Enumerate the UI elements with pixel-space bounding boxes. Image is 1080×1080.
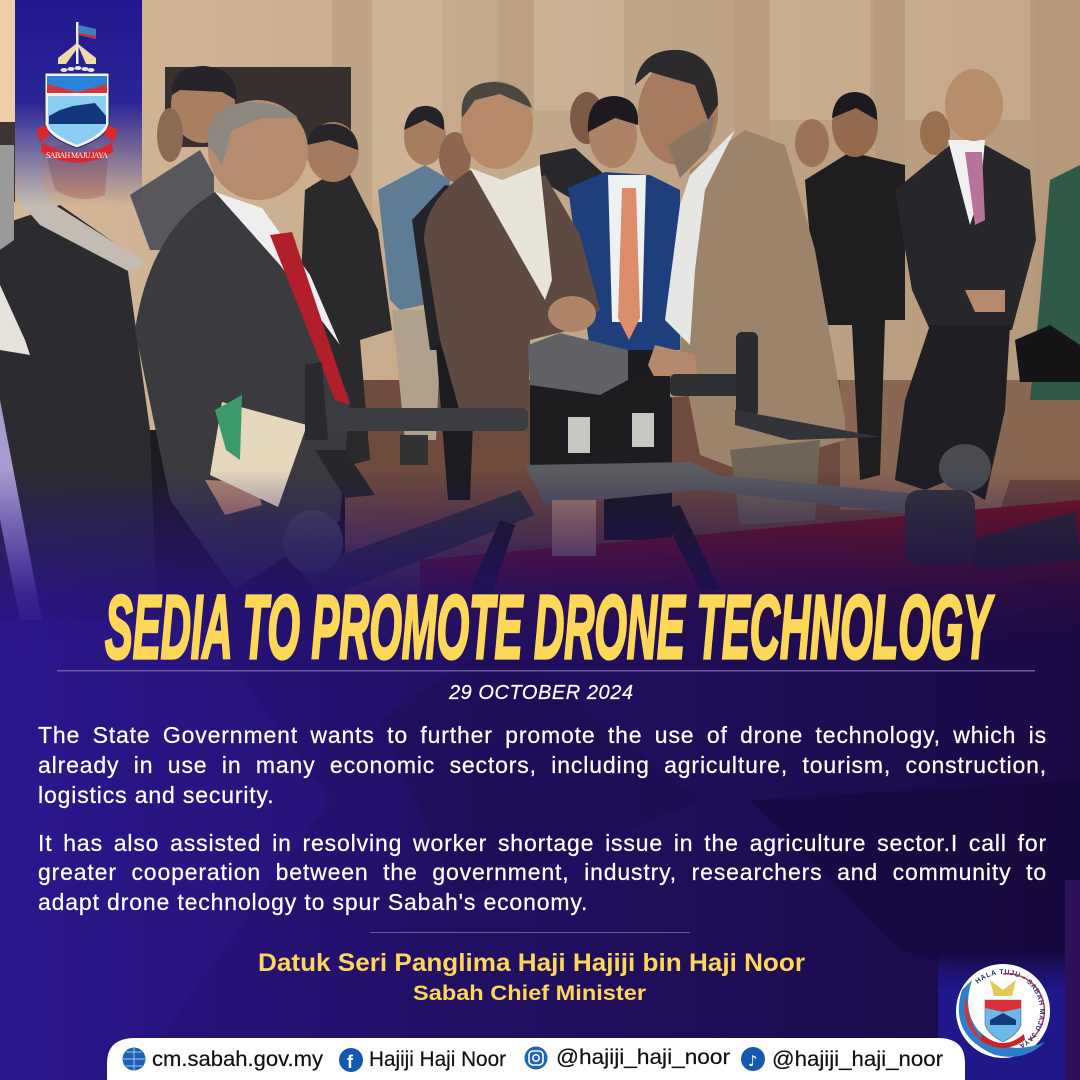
paragraph two: greater cooperation between the government, industry, researchers and community to (38, 859, 1047, 885)
footer logo badge: HALA TUJU • SABAH MAJU JAYA (975, 969, 1045, 1048)
paragraph one: The State Government wants to further promote the use of drone technology, which is (38, 722, 1047, 748)
paragraph two: It has also assisted in resolving worker shortage issue in the agriculture sector.I call for (38, 830, 1047, 856)
person: man in dark suit, background (300, 122, 392, 470)
person: man in black uniform (795, 92, 950, 480)
floor (340, 380, 1080, 700)
crest: Sabah coat of arms (36, 22, 118, 162)
facebook: Hajiji Haji Noor (369, 1048, 506, 1071)
person: main man with red tie (135, 100, 350, 590)
facebook: f (347, 1052, 354, 1072)
lavender strip, lower left (0, 400, 42, 620)
tiktok: ♪ (748, 1052, 758, 1070)
attribution: Datuk Seri Panglima Haji Hajiji bin Haji Noor (258, 949, 805, 977)
person: man in tan blazer (635, 50, 845, 525)
ribbon motto: SABAH MAJU JAYA (46, 151, 108, 160)
drone (283, 332, 991, 600)
person: dark man beside centre (412, 132, 476, 500)
purple background with fade over photo (0, 440, 1080, 1080)
person: woman in green (1015, 165, 1080, 400)
instagram: @hajiji_haji_noor (556, 1046, 730, 1069)
paragraph one: logistics and security. (38, 782, 274, 808)
paragraph one: already in use in many economic sectors, including agriculture, tourism, construction, (38, 752, 1047, 778)
person: central man in brown check jacket (424, 81, 600, 420)
paragraph two: adapt drone technology to spur Sabah's economy. (38, 889, 588, 915)
person: woman in headscarf (0, 100, 160, 700)
red table and book (420, 500, 1080, 700)
certificate held by man (210, 402, 307, 507)
divider and date: 29 OCTOBER 2024 (448, 682, 633, 704)
paragraph two (38, 830, 1047, 916)
person: man in grey jacket behind (130, 66, 236, 250)
person: man in blue suit with salmon tie (540, 92, 680, 540)
tiktok: @hajiji_haji_noor (772, 1048, 943, 1071)
person: man in blue shirt (378, 106, 450, 465)
attribution: Sabah Chief Minister (413, 982, 646, 1005)
paragraph one (38, 722, 1047, 808)
person: bald man with pink tie (895, 69, 1036, 500)
website: cm.sabah.gov.my (152, 1048, 324, 1071)
